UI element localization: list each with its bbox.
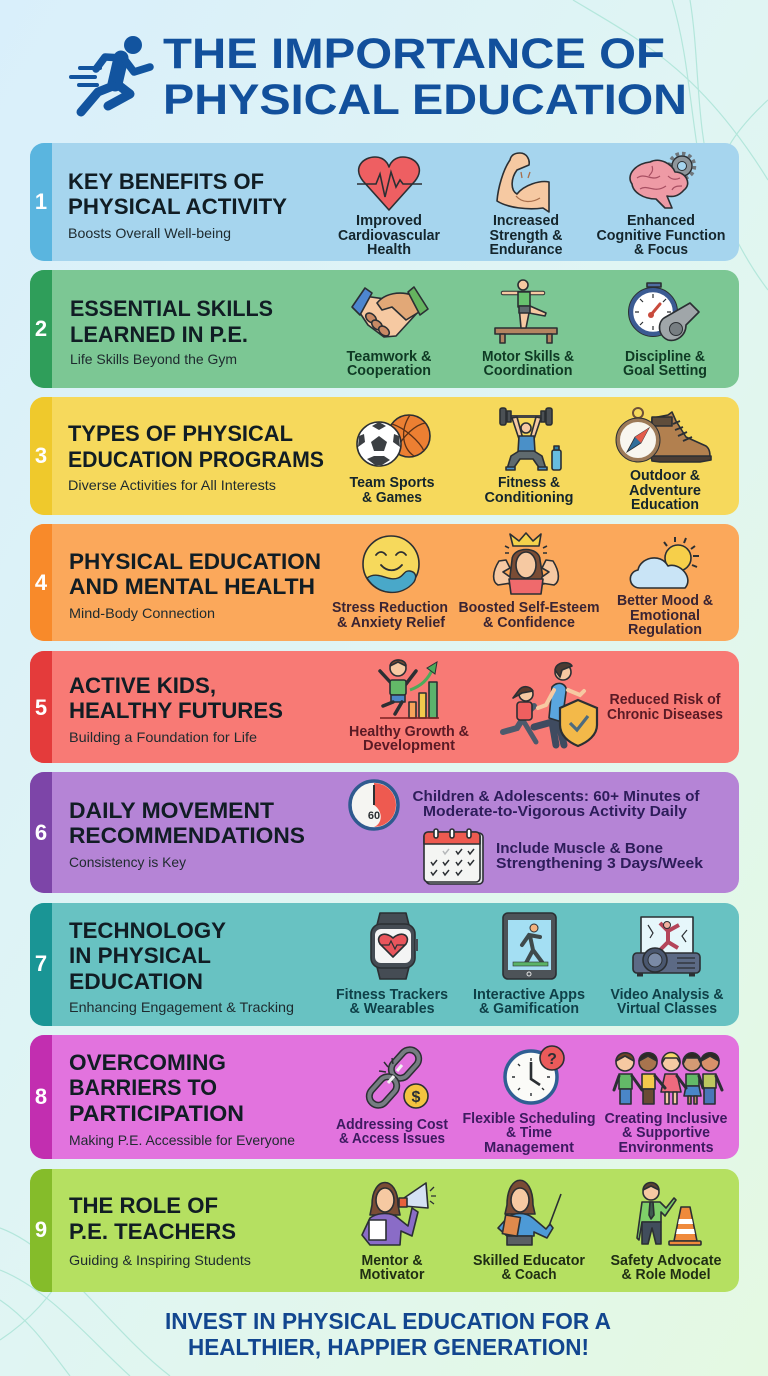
panel: 8 barriers: BARRIERS TO: [69, 1075, 217, 1100]
labels: teachers: Motivator: [360, 1267, 425, 1283]
labels: benefits: Health: [367, 242, 411, 258]
panel: 1 key benefits: [30, 143, 739, 261]
labels: active kids: [349, 692, 723, 754]
labels: barriers: Environments: [618, 1140, 714, 1156]
panel: 8 barriers: Making P.E. Accessible for Everyone: [69, 1132, 295, 1148]
panel: 4 mental health: 4: [35, 570, 48, 595]
icon: heart with pulse: [357, 157, 422, 210]
labels: active kids: Reduced Risk of: [610, 692, 721, 708]
panel: 4 mental health: Mind-Body Connection: [69, 605, 215, 621]
labels: barriers: & Time: [506, 1125, 552, 1141]
panel: 9 teachers: [30, 1169, 739, 1292]
icon: balance beam gymnast: [495, 280, 557, 343]
labels: mental health: Stress Reduction: [332, 600, 448, 616]
icon: tablet app: [503, 913, 556, 979]
labels: teachers: & Role Model: [622, 1267, 710, 1283]
labels: barriers: Addressing Cost: [336, 1117, 448, 1133]
panel: 1 key benefits: KEY BENEFITS OF: [68, 169, 264, 194]
text: daily minutes: Moderate-to-Vigorous Activity Daily: [423, 804, 687, 820]
panel: 7 technology: TECHNOLOGY: [69, 918, 226, 943]
labels: skills: [346, 349, 707, 379]
panel: 6 daily movement: Consistency is Key: [69, 854, 186, 870]
panel: 6 daily movement: [30, 772, 739, 893]
icon: clock with question mark: [505, 1046, 564, 1103]
panel: 3 program types: EDUCATION PROGRAMS: [68, 447, 324, 472]
icon: running figure: [71, 36, 150, 112]
panel: 6 daily movement: RECOMMENDATIONS: [69, 823, 305, 848]
text: strengthening: Include Muscle & Bone: [496, 841, 663, 857]
labels: barriers: & Access Issues: [339, 1131, 445, 1147]
footer call to action: INVEST IN PHYSICAL EDUCATION FOR A: [165, 1308, 611, 1334]
labels: benefits: Increased: [493, 213, 559, 229]
labels: benefits: Enhanced: [627, 213, 695, 229]
panel: 2 essential skills: [30, 270, 739, 388]
icon: 60 minute timer: [350, 781, 398, 829]
labels: active kids: Development: [363, 738, 455, 754]
panel: 5 active kids: 5: [35, 695, 47, 720]
title: THE IMPORTANCE OF: [163, 30, 665, 78]
panel: 5 active kids: [30, 651, 739, 763]
panel: 8 barriers: [30, 1035, 739, 1159]
panel: 1 key benefits: PHYSICAL ACTIVITY: [68, 194, 287, 219]
panel: 1 key benefits: Boosts Overall Well-being: [68, 225, 231, 241]
labels: teachers: & Coach: [502, 1267, 556, 1283]
panel: 5 active kids: ACTIVE KIDS,: [69, 673, 216, 698]
labels: technology: Video Analysis &: [610, 987, 724, 1003]
text: daily minutes: [412, 789, 700, 820]
labels: programs: Team Sports: [350, 475, 434, 491]
panel: 4 mental health: AND MENTAL HEALTH: [69, 574, 315, 599]
panel: 7 technology: EDUCATION: [69, 969, 203, 994]
labels: mental health: Regulation: [628, 622, 702, 638]
labels: mental health: Emotional: [630, 608, 700, 624]
icon: brain and gear: [630, 154, 694, 208]
footer call to action: [165, 1308, 611, 1360]
labels: teachers: Mentor &: [362, 1253, 423, 1269]
labels: active kids: Healthy Growth &: [349, 724, 470, 740]
icon: handshake: [352, 287, 428, 338]
labels: programs: Outdoor &: [630, 468, 701, 484]
icon: runners with shield: [503, 663, 597, 746]
title: [163, 30, 687, 124]
panel: 7 technology: [30, 903, 739, 1026]
panel: 9 teachers: 9: [35, 1217, 47, 1242]
panel: 8 barriers: OVERCOMING: [69, 1050, 226, 1075]
labels: benefits: & Focus: [634, 242, 688, 258]
labels: technology: Virtual Classes: [617, 1001, 717, 1017]
panel: 7 technology: 7: [35, 951, 47, 976]
labels: mental health: & Confidence: [483, 615, 575, 631]
labels: benefits: Improved: [356, 213, 422, 229]
labels: mental health: Better Mood &: [617, 593, 713, 609]
panel: 6 daily movement: DAILY MOVEMENT: [69, 798, 275, 823]
text: strengthening: Strengthening 3 Days/Week: [496, 856, 704, 872]
labels: benefits: Cognitive Function: [596, 228, 726, 244]
panel: 2 essential skills: LEARNED IN P.E.: [70, 322, 248, 347]
panel: 4 mental health: [30, 524, 739, 641]
labels: benefits: Cardiovascular: [338, 228, 440, 244]
panel: 5 active kids: Building a Foundation for Life: [69, 729, 257, 745]
labels: programs: Education: [631, 497, 699, 513]
labels: programs: & Games: [362, 490, 422, 506]
panel: 6 daily movement: 6: [35, 820, 47, 845]
text: daily minutes: Children & Adolescents: 60+ Minutes of: [412, 789, 700, 805]
labels: teachers: Safety Advocate: [610, 1253, 722, 1269]
icon: broken chain and coin: $: [412, 1089, 421, 1106]
panel: 8 barriers: PARTICIPATION: [69, 1101, 244, 1126]
labels: technology: [336, 987, 724, 1017]
labels: mental health: & Anxiety Relief: [337, 615, 445, 631]
labels: benefits: [338, 213, 726, 258]
labels: skills: Goal Setting: [623, 363, 707, 379]
icon: cloud and sun: [630, 537, 699, 588]
panel: 9 teachers: THE ROLE OF: [69, 1193, 218, 1218]
labels: skills: Coordination: [484, 363, 572, 379]
panel: 7 technology: IN PHYSICAL: [69, 943, 211, 968]
text: strengthening: [496, 841, 704, 872]
icon: broken chain and coin: [366, 1046, 428, 1109]
labels: skills: Motor Skills &: [482, 349, 574, 365]
icon: mentor with megaphone: [362, 1182, 436, 1245]
panel: 8 barriers: 8: [35, 1084, 47, 1109]
icon: stopwatch and whistle: [628, 283, 699, 340]
icon: flexed bicep: [497, 153, 549, 212]
labels: technology: Fitness Trackers: [336, 987, 448, 1003]
icon: calendar with checks: [424, 829, 483, 884]
icon: jumping child and growth chart: [380, 660, 439, 718]
labels: programs: [350, 468, 701, 513]
labels: barriers: Management: [484, 1140, 574, 1156]
icon: compass and boot: [616, 408, 711, 462]
panel: 2 essential skills: Life Skills Beyond the Gym: [70, 351, 237, 367]
panel: 3 program types: [30, 397, 739, 515]
panel: 7 technology: Enhancing Engagement & Tracking: [69, 999, 294, 1015]
labels: technology: & Wearables: [350, 1001, 434, 1017]
icon: fitness watch: [371, 913, 418, 979]
icon: projector: [633, 917, 700, 976]
labels: skills: Cooperation: [347, 363, 431, 379]
icon: group of diverse children: [614, 1052, 722, 1104]
panel: 2 essential skills: 2: [35, 316, 47, 341]
labels: mental health: Boosted Self-Esteem: [458, 600, 600, 616]
icon: 60 minute timer: 60: [368, 810, 380, 822]
labels: technology: & Gamification: [479, 1001, 579, 1017]
panel: 1 key benefits: 1: [35, 189, 47, 214]
footer call to action: HEALTHIER, HAPPIER GENERATION!: [188, 1334, 589, 1360]
labels: teachers: Skilled Educator: [473, 1253, 585, 1269]
panel: 3 program types: 3: [35, 443, 47, 468]
labels: active kids: Chronic Diseases: [607, 707, 723, 723]
labels: barriers: Creating Inclusive: [604, 1111, 728, 1127]
panel: 9 teachers: Guiding & Inspiring Students: [69, 1252, 251, 1268]
labels: skills: Teamwork &: [346, 349, 432, 365]
panel: 3 program types: Diverse Activities for All Interests: [68, 477, 276, 493]
panel: 9 teachers: P.E. TEACHERS: [69, 1219, 236, 1244]
icon: confident girl with crown: [494, 533, 558, 594]
panel: 4 mental health: PHYSICAL EDUCATION: [69, 549, 321, 574]
labels: benefits: Endurance: [490, 242, 562, 258]
icon: clock with question mark: ?: [547, 1051, 557, 1068]
labels: barriers: & Supportive: [622, 1125, 710, 1141]
icon: weightlifter with bottle: [500, 408, 561, 470]
panel: 5 active kids: HEALTHY FUTURES: [69, 698, 283, 723]
labels: technology: Interactive Apps: [473, 987, 585, 1003]
labels: programs: Fitness &: [498, 475, 561, 491]
labels: skills: Discipline &: [625, 349, 706, 365]
icon: smiling sun with wave: [363, 536, 419, 592]
labels: barriers: Flexible Scheduling: [462, 1111, 596, 1127]
icon: soccer ball and basketball: [357, 415, 430, 466]
labels: barriers: [336, 1111, 728, 1156]
icon: safety advocate and cone: [637, 1182, 701, 1245]
panel: 3 program types: TYPES OF PHYSICAL: [68, 421, 293, 446]
labels: mental health: [332, 593, 713, 638]
icon: educator with pointer: [498, 1180, 561, 1245]
labels: teachers: [360, 1253, 722, 1283]
labels: benefits: Strength &: [490, 228, 563, 244]
labels: programs: Conditioning: [484, 490, 574, 506]
labels: programs: Adventure: [629, 483, 701, 499]
title: PHYSICAL EDUCATION: [163, 76, 687, 124]
panel: 2 essential skills: ESSENTIAL SKILLS: [70, 296, 273, 321]
